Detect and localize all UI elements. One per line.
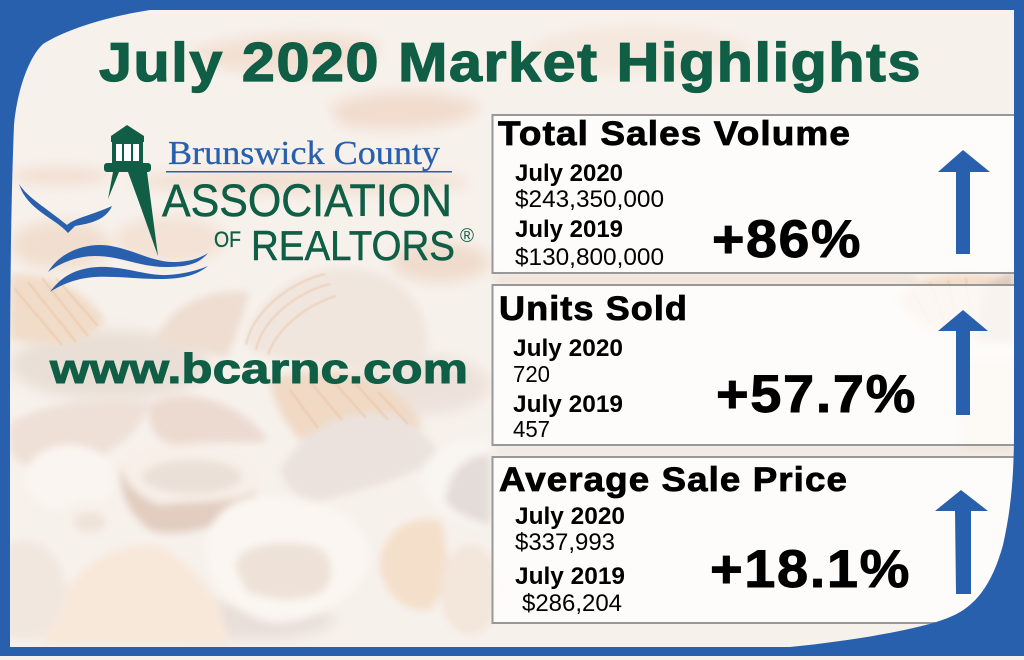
figures bbox=[515, 503, 625, 617]
logo: Brunswick County Association of Realtors bbox=[19, 125, 474, 292]
figures: July 2020 bbox=[515, 160, 623, 187]
logo text: Realtors: REALTORS bbox=[251, 222, 455, 269]
website: www.bcarnc.com bbox=[49, 345, 468, 392]
figures: July 2020 bbox=[513, 335, 623, 362]
title: July 2020 Market Highlights bbox=[99, 31, 922, 93]
panel: average sale price bbox=[492, 457, 1022, 623]
registered mark: ® bbox=[460, 226, 474, 247]
heading: Units Sold bbox=[499, 290, 688, 328]
icon: seagull bbox=[19, 184, 112, 233]
figures: 720 bbox=[513, 361, 550, 387]
icon: up arrow bbox=[935, 490, 988, 594]
panel: total sales volume bbox=[492, 115, 1022, 273]
figures bbox=[513, 335, 623, 442]
figures bbox=[515, 160, 664, 271]
shells bbox=[0, 268, 1015, 647]
shell ribs bbox=[14, 274, 972, 428]
logo text: of: OF bbox=[214, 227, 241, 252]
icon: lighthouse bbox=[104, 125, 158, 256]
figures: July 2019 bbox=[515, 216, 623, 243]
heading: Average Sale Price bbox=[499, 461, 848, 499]
figures: $130,800,000 bbox=[515, 244, 664, 271]
percentage: +18.1% bbox=[710, 540, 911, 599]
percentage: +57.7% bbox=[716, 365, 917, 424]
heading: Total Sales Volume bbox=[498, 115, 851, 153]
figures: $337,993 bbox=[515, 529, 615, 556]
percentage: +86% bbox=[712, 210, 862, 269]
figures: July 2019 bbox=[513, 391, 623, 418]
figures: July 2020 bbox=[515, 503, 625, 530]
icon: up arrow bbox=[938, 150, 990, 254]
figures: $286,204 bbox=[522, 590, 622, 617]
panel: units sold bbox=[492, 285, 1022, 445]
figures: July 2019 bbox=[515, 563, 625, 590]
soft upper tones bbox=[10, 26, 750, 640]
icon: waves bbox=[48, 245, 208, 292]
figures: $243,350,000 bbox=[515, 186, 664, 213]
figures: 457 bbox=[513, 416, 550, 442]
logo text: Brunswick County: Brunswick County bbox=[168, 135, 440, 172]
icon: up arrow bbox=[938, 310, 988, 415]
logo text: Association: ASSOCIATION bbox=[162, 175, 452, 226]
